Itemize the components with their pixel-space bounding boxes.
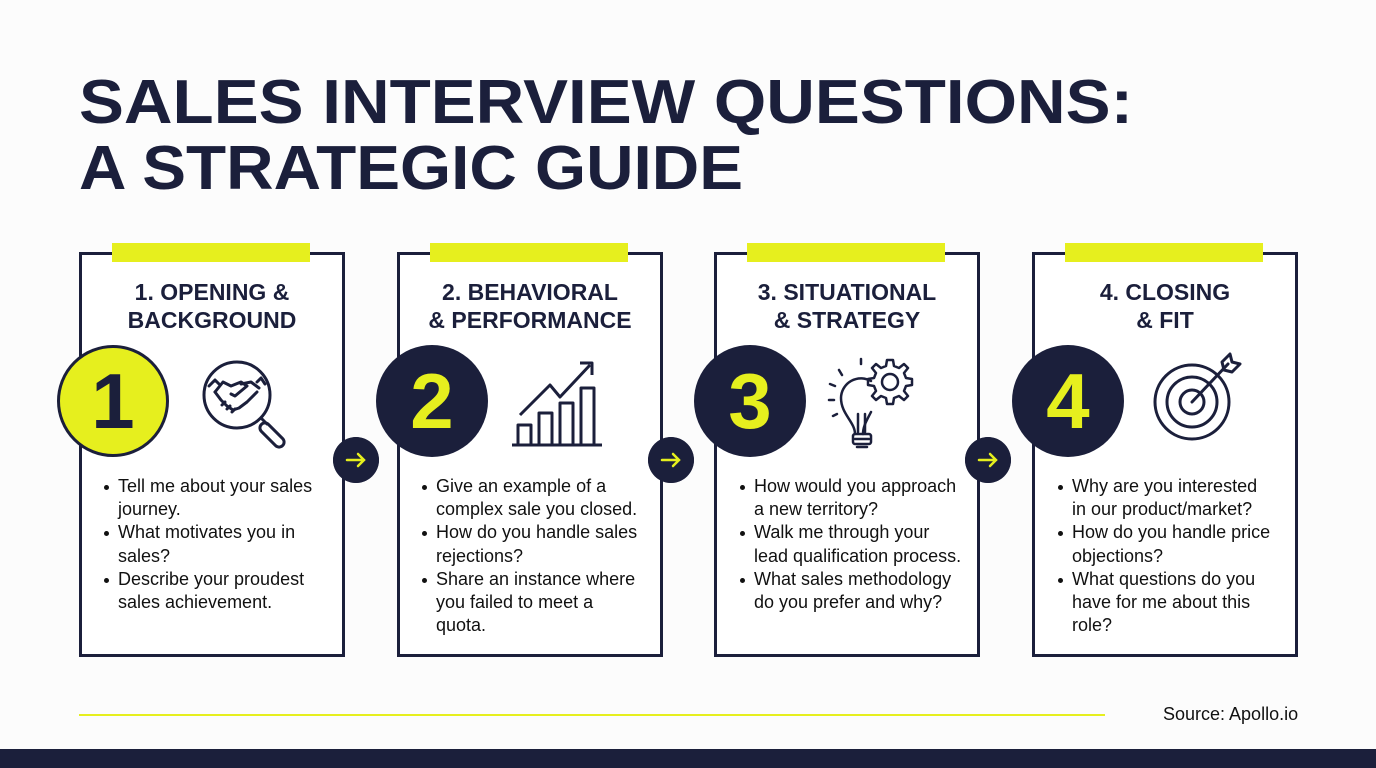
heading 1: 1. OPENING & — [135, 279, 289, 305]
bottom band — [0, 749, 1376, 768]
heading 2: 2. BEHAVIORAL — [442, 279, 618, 305]
icon: lightbulb gear — [828, 358, 914, 448]
list 4: How do you handle price — [1072, 522, 1270, 542]
list 3 — [740, 476, 961, 612]
arrow 2 — [648, 437, 694, 483]
list 2: you failed to meet a — [436, 592, 593, 612]
source text: Source: Apollo.io — [1163, 704, 1298, 724]
heading 4: & FIT — [1136, 307, 1194, 333]
number circle 2: 2 — [410, 357, 454, 445]
list 4: Why are you interested — [1072, 476, 1257, 496]
title — [79, 68, 1133, 200]
heading 2: & PERFORMANCE — [428, 307, 632, 333]
list 4: have for me about this — [1072, 592, 1250, 612]
list 3: What sales methodology — [754, 569, 951, 589]
panel: behavioral & performance — [397, 252, 663, 657]
tab 4 — [1065, 243, 1263, 262]
panel: opening & background — [79, 252, 345, 657]
list 1: What motivates you in — [118, 522, 295, 542]
list 4: role? — [1072, 615, 1112, 635]
icon: handshake magnifier — [202, 360, 286, 449]
list 1: Describe your proudest — [118, 569, 304, 589]
list 1: sales? — [118, 546, 170, 566]
list 3: How would you approach — [754, 476, 956, 496]
list 2: Share an instance where — [436, 569, 635, 589]
list 4: objections? — [1072, 546, 1163, 566]
heading 4 — [1100, 279, 1230, 333]
heading 1: BACKGROUND — [128, 307, 296, 333]
number circle 4 — [1012, 345, 1124, 457]
heading 3 — [758, 279, 936, 333]
number circle 3 — [694, 345, 806, 457]
list 3: a new territory? — [754, 499, 878, 519]
tab 2 — [430, 243, 628, 262]
tab 1 — [112, 243, 310, 262]
panel: closing & fit — [1032, 252, 1298, 657]
list 4: in our product/market? — [1072, 499, 1252, 519]
number circle 1 — [57, 345, 169, 457]
list 2: rejections? — [436, 546, 523, 566]
list 1 — [104, 476, 312, 612]
arrow 3 — [965, 437, 1011, 483]
list 1: journey. — [118, 499, 181, 519]
list 2 — [422, 476, 637, 635]
list 1: sales achievement. — [118, 592, 272, 612]
number circle 2 — [376, 345, 488, 457]
list 2: complex sale you closed. — [436, 499, 637, 519]
heading 3: 3. SITUATIONAL — [758, 279, 936, 305]
number circle 4: 4 — [1046, 357, 1090, 445]
heading 4: 4. CLOSING — [1100, 279, 1230, 305]
icon: target — [1154, 352, 1242, 440]
list 2: quota. — [436, 615, 486, 635]
number circle 3: 3 — [728, 357, 772, 445]
list 2: How do you handle sales — [436, 522, 637, 542]
list 3: lead qualification process. — [754, 546, 961, 566]
list 4: What questions do you — [1072, 569, 1255, 589]
number circle 1: 1 — [91, 357, 135, 445]
icon: growth chart — [512, 362, 602, 446]
list 3: do you prefer and why? — [754, 592, 942, 612]
list 4 — [1058, 476, 1270, 635]
arrow 1 — [333, 437, 379, 483]
list 3: Walk me through your — [754, 522, 929, 542]
title: SALES INTERVIEW QUESTIONS: — [79, 68, 1133, 137]
list 1: Tell me about your sales — [118, 476, 312, 496]
heading 1 — [128, 279, 296, 333]
list 2: Give an example of a — [436, 476, 606, 496]
heading 2 — [428, 279, 632, 333]
heading 3: & STRATEGY — [774, 307, 920, 333]
footer rule — [79, 714, 1105, 716]
tab 3 — [747, 243, 945, 262]
panel: situational & strategy — [714, 252, 980, 657]
